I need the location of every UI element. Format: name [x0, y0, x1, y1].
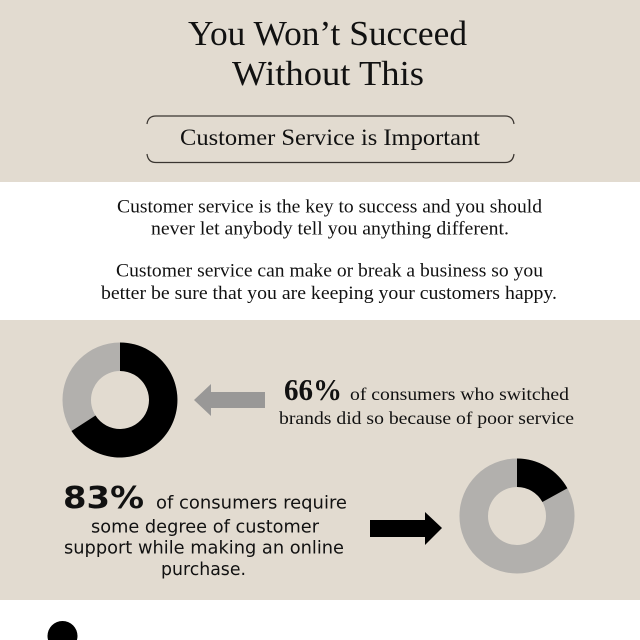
donut chart: 66% [62, 342, 178, 458]
intro text block: Customer service can make or break a business so you [116, 262, 543, 282]
stat: 83% text: support while making an online [64, 538, 344, 559]
subtitle: Customer Service is Important [180, 125, 481, 150]
stat: 83% text: some degree of customer [91, 517, 320, 538]
stat: 66% text: of consumers who switched [350, 384, 569, 404]
stat: 83% text: 83% [63, 481, 144, 516]
subtitle bracket frame [147, 116, 514, 162]
donut chart: 83% [459, 458, 575, 574]
arrow: pointing right to donut [370, 512, 442, 545]
intro text block [101, 198, 557, 304]
panel: statistics band [0, 320, 640, 600]
intro text block: never let anybody tell you anything different. [151, 220, 509, 240]
footer bullet dot [48, 621, 78, 640]
panel: intro band [0, 182, 640, 320]
stat: 83% text: purchase. [161, 559, 246, 580]
stat: 83% text [63, 481, 347, 580]
intro text block: better be sure that you are keeping your customers happy. [101, 284, 557, 304]
stat: 66% text: 66% [284, 372, 342, 407]
stat: 66% text [279, 372, 574, 428]
panel: header band [0, 0, 640, 182]
title: You Won’t Succeed [188, 14, 467, 53]
stat: 66% text: brands did so because of poor service [279, 408, 574, 428]
title: Without This [232, 54, 424, 93]
arrow: pointing left to donut [194, 384, 265, 416]
stat: 83% text: of consumers require [156, 492, 347, 514]
intro text block: Customer service is the key to success and you should [117, 198, 543, 218]
title [188, 14, 467, 93]
